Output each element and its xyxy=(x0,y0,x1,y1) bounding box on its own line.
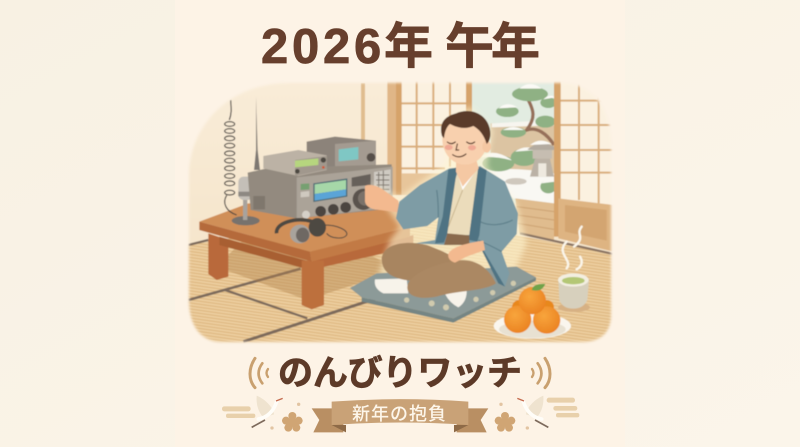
kimono inner xyxy=(447,166,479,235)
tatami floor xyxy=(188,220,612,344)
collar bands xyxy=(435,167,457,243)
title: 午 xyxy=(445,20,494,74)
crane left xyxy=(252,396,283,427)
stone lantern xyxy=(528,144,554,151)
plum flower left xyxy=(270,403,303,432)
lower wood wall under garden xyxy=(515,198,554,242)
left clouds xyxy=(222,406,255,418)
button pad xyxy=(352,174,371,187)
crane right xyxy=(517,396,548,427)
microphone coil cord xyxy=(225,100,237,215)
microphone xyxy=(232,177,260,225)
tea cup with steam xyxy=(558,227,590,312)
hand on knob xyxy=(365,185,400,213)
title: 年 xyxy=(491,20,540,74)
illustration: ham radio operator in a Japanese room xyxy=(180,80,620,350)
table shadow xyxy=(228,242,386,298)
pine tree xyxy=(527,97,554,145)
low table xyxy=(199,203,413,309)
neck xyxy=(456,158,479,187)
wall post xyxy=(360,83,366,140)
headphones xyxy=(277,218,347,243)
radio wave arcs left xyxy=(250,358,268,388)
legs xyxy=(382,243,460,281)
knobs xyxy=(315,206,326,217)
eyes and mouth xyxy=(447,142,475,157)
ribbon banner xyxy=(312,399,488,432)
person xyxy=(365,111,518,307)
title: 年 xyxy=(384,20,433,74)
far sock xyxy=(375,278,408,293)
haori jacket xyxy=(396,166,518,287)
garden view xyxy=(472,80,556,203)
person glow xyxy=(370,104,528,274)
hand on knee xyxy=(448,241,485,263)
tangerines on a plate xyxy=(494,284,571,339)
floor cushion xyxy=(350,267,536,323)
title: 2026 xyxy=(261,20,381,74)
wall xyxy=(188,83,610,252)
upper rear radio xyxy=(307,137,376,170)
tatami borders xyxy=(188,240,377,342)
main transceiver xyxy=(248,164,393,219)
obi xyxy=(444,233,469,245)
radio wave arcs right xyxy=(532,358,550,388)
left shoji xyxy=(387,80,472,195)
right clouds xyxy=(547,398,579,417)
antenna xyxy=(254,97,260,170)
ribbon text: 新年の抱負 xyxy=(352,404,447,424)
hair xyxy=(441,111,490,144)
plum flower right xyxy=(495,403,529,432)
center panel xyxy=(175,0,625,447)
right shoji xyxy=(520,80,614,254)
small top radio xyxy=(263,150,327,176)
radio display xyxy=(313,178,347,202)
face xyxy=(442,125,486,164)
subtitle heading: のんびりワッチ xyxy=(278,354,522,393)
